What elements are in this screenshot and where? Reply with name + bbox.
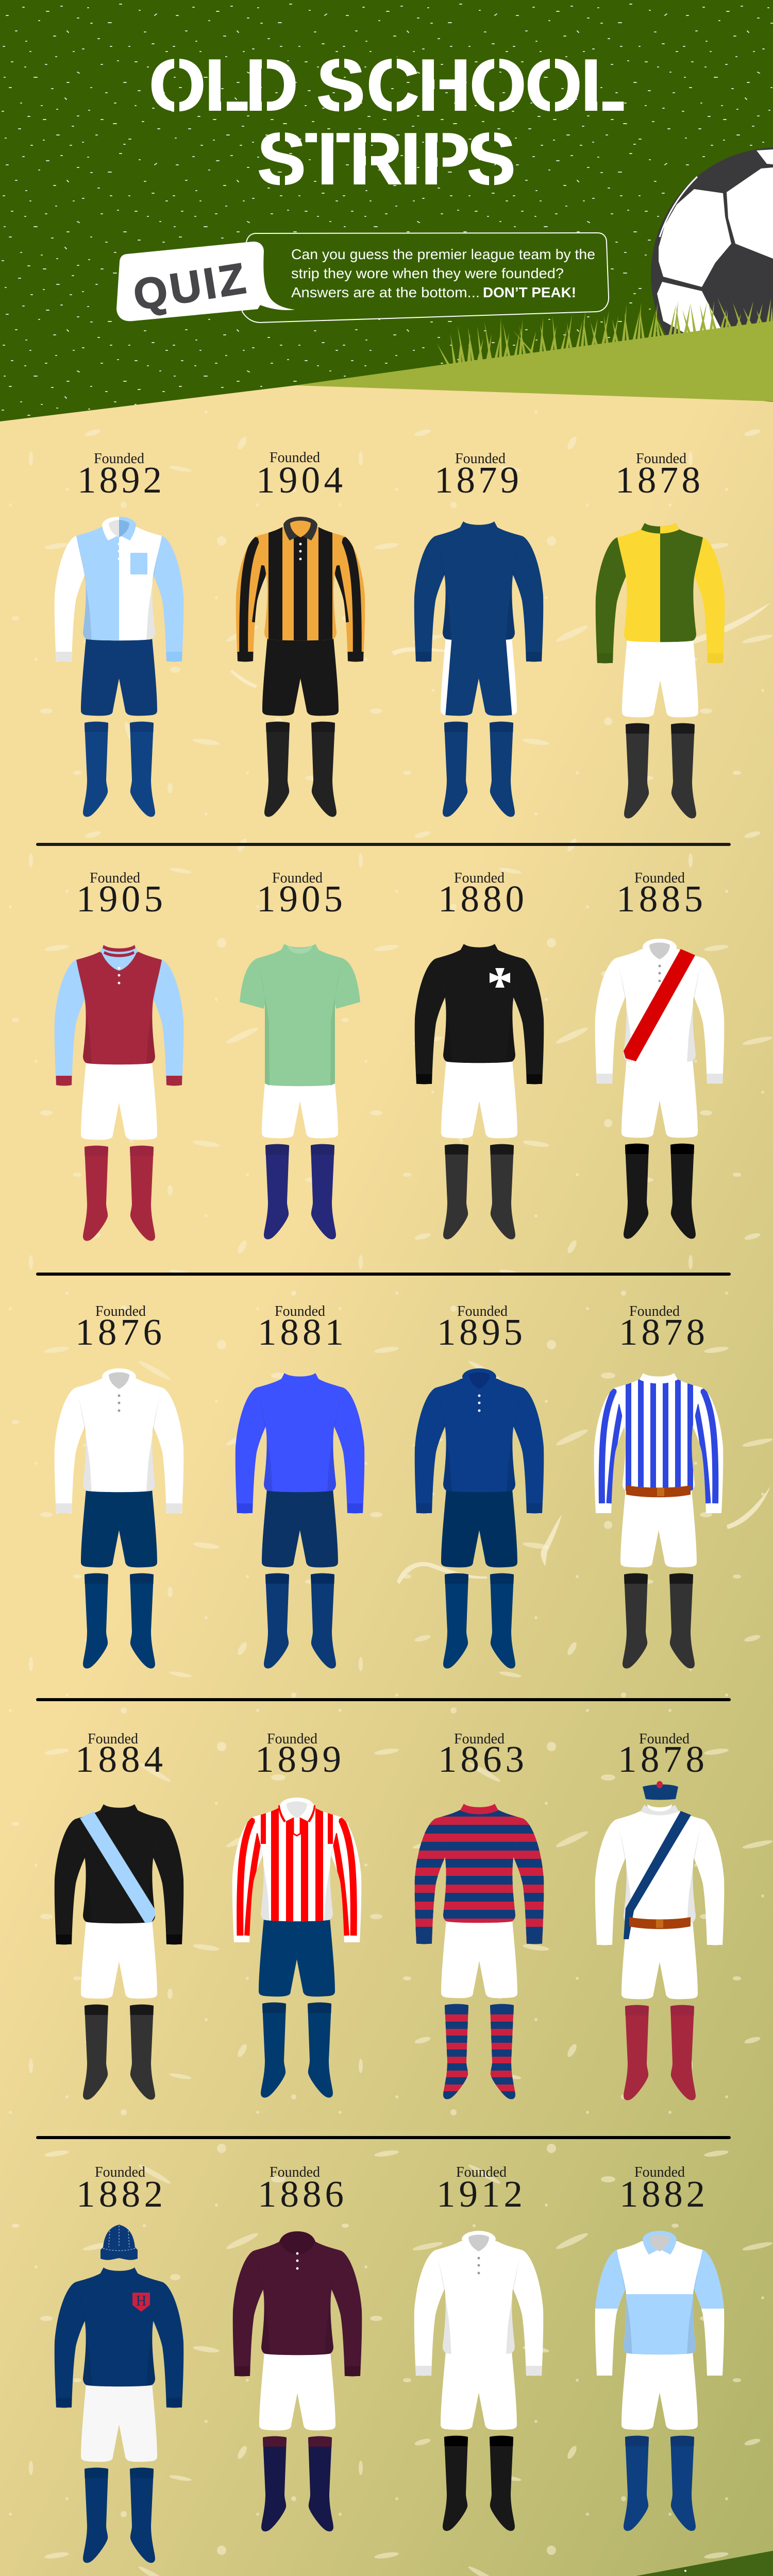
shirt bbox=[414, 2231, 543, 2376]
socks bbox=[443, 1144, 515, 1240]
divider line 2 bbox=[36, 1273, 731, 1276]
socks bbox=[624, 2436, 696, 2531]
heading: 1863: 1863 bbox=[438, 1738, 524, 1780]
quiz text box: strip they wore when they were founded? bbox=[291, 265, 564, 281]
socks bbox=[443, 722, 515, 817]
shorts bbox=[441, 635, 517, 718]
heading: 1905 second: Founded bbox=[272, 870, 323, 886]
row 5 headings bbox=[76, 2164, 705, 2215]
shirt bbox=[412, 1804, 546, 1944]
large sand paint splashes bbox=[230, 603, 770, 1584]
kit: 1884 bbox=[55, 1804, 183, 2100]
heading: 1884: Founded bbox=[88, 1731, 138, 1747]
heading: 1905: Founded bbox=[90, 870, 140, 886]
shorts bbox=[441, 2351, 517, 2430]
shorts bbox=[620, 1489, 697, 1567]
shirt bbox=[596, 518, 725, 664]
shorts bbox=[81, 1061, 157, 1140]
socks bbox=[264, 722, 337, 817]
kit: 1892 bbox=[55, 517, 183, 817]
heading: 1880: Founded bbox=[454, 870, 505, 886]
light grass strip bbox=[296, 321, 773, 401]
shorts bbox=[621, 2351, 698, 2430]
shirt bbox=[55, 1804, 183, 1944]
heading: 1892: Founded bbox=[94, 451, 144, 467]
kit: 1878 blue stripes bbox=[594, 1373, 723, 1669]
heading: 1878: Founded bbox=[639, 1731, 690, 1747]
shirt bbox=[415, 944, 544, 1084]
shorts bbox=[262, 1060, 338, 1138]
shirt bbox=[414, 521, 543, 662]
heading: 1885: Founded bbox=[634, 870, 685, 886]
shorts bbox=[259, 2352, 335, 2430]
heading: 1884: 1884 bbox=[75, 1738, 163, 1780]
kit: 1881 bbox=[236, 1373, 364, 1669]
kit: 1895 bbox=[415, 1368, 544, 1669]
icon: white cross badge bbox=[490, 968, 510, 988]
shirt bbox=[236, 1373, 364, 1514]
heading: 1879: 1879 bbox=[434, 459, 519, 501]
belt bbox=[629, 1917, 691, 1929]
icon: cap bbox=[100, 2225, 138, 2260]
quiz text box: DON’T PEAK! bbox=[483, 284, 576, 300]
row 4 headings bbox=[75, 1731, 704, 1780]
grass blades bbox=[437, 298, 773, 367]
icon: cap bbox=[643, 1781, 678, 1800]
heading: 1885: 1885 bbox=[616, 878, 703, 920]
shirt bbox=[55, 2267, 183, 2408]
title: OLD SCHOOL bbox=[149, 44, 626, 126]
socks bbox=[624, 1144, 696, 1239]
socks bbox=[83, 1146, 155, 1241]
football bbox=[651, 147, 773, 402]
kit: 1880 bbox=[415, 944, 544, 1240]
kit: 1878 yellow and green bbox=[596, 518, 725, 819]
shirt bbox=[55, 517, 183, 662]
kit: 1863 bbox=[412, 1804, 546, 2102]
heading: 1895: Founded bbox=[457, 1303, 508, 1319]
kit: 1882 sky blue bbox=[593, 2231, 727, 2531]
shorts bbox=[621, 1921, 698, 1999]
heading: 1863: Founded bbox=[454, 1731, 505, 1747]
shirt bbox=[595, 939, 724, 1084]
shorts bbox=[441, 1489, 517, 1567]
heading: 1912: 1912 bbox=[436, 2173, 523, 2215]
heading: 1905 second: 1905 bbox=[257, 878, 343, 920]
shorts bbox=[259, 1918, 335, 1996]
socks bbox=[83, 1573, 155, 1669]
shorts bbox=[621, 1059, 698, 1138]
shorts bbox=[81, 1920, 157, 1998]
socks bbox=[623, 1573, 695, 1669]
heading: 1878: Founded bbox=[629, 1303, 680, 1319]
divider line 4 bbox=[36, 2136, 731, 2139]
shirt bbox=[594, 1373, 723, 1513]
shorts bbox=[441, 1920, 517, 1998]
socks bbox=[83, 2468, 155, 2563]
heading: 1899: Founded bbox=[267, 1731, 317, 1747]
shirt bbox=[240, 944, 360, 1086]
heading: 1912: Founded bbox=[456, 2164, 507, 2180]
kit: 1904 bbox=[236, 517, 365, 817]
socks bbox=[624, 723, 696, 819]
shirt bbox=[236, 517, 365, 664]
socks bbox=[443, 2436, 515, 2531]
heading: 1876: 1876 bbox=[75, 1311, 162, 1353]
socks bbox=[264, 1573, 336, 1669]
icon: crest: H bbox=[136, 2293, 146, 2309]
socks bbox=[443, 1573, 515, 1669]
heading: 1881: Founded bbox=[275, 1303, 325, 1319]
socks bbox=[261, 2003, 333, 2098]
heading: 1882: Founded bbox=[95, 2164, 145, 2180]
shirt bbox=[55, 1368, 183, 1514]
heading: 1886: 1886 bbox=[258, 2173, 344, 2215]
shirt bbox=[595, 1804, 724, 1945]
icon: crest bbox=[132, 2293, 150, 2312]
shorts bbox=[81, 637, 157, 716]
heading: 1878: 1878 bbox=[615, 459, 700, 501]
heading: 1880: 1880 bbox=[438, 878, 524, 920]
heading: 1879: Founded bbox=[455, 451, 506, 467]
heading: 1878: 1878 bbox=[618, 1738, 704, 1780]
heading: 1886: Founded bbox=[270, 2164, 320, 2180]
heading: 1882 second: Founded bbox=[634, 2164, 685, 2180]
socks bbox=[83, 2005, 155, 2100]
shorts bbox=[262, 1489, 338, 1567]
shirt bbox=[232, 1798, 361, 1942]
heading: 1892: 1892 bbox=[77, 459, 162, 501]
row 1 headings bbox=[77, 450, 700, 501]
header pitch panel bbox=[0, 0, 773, 421]
quiz text box: Can you guess the premier league team by the bbox=[291, 246, 595, 262]
answers panel bbox=[0, 2551, 773, 2576]
socks bbox=[264, 1144, 336, 1240]
heading: 1878: 1878 bbox=[619, 1311, 705, 1353]
title: STRIPS bbox=[257, 118, 516, 200]
quiz text box bbox=[242, 233, 609, 323]
shirt bbox=[233, 2231, 362, 2376]
kit: 1886 bbox=[233, 2231, 362, 2532]
shirt bbox=[55, 945, 183, 1086]
socks bbox=[261, 2436, 333, 2532]
quiz text box: Answers are at the bottom... bbox=[291, 284, 480, 300]
row 3 headings bbox=[75, 1303, 705, 1353]
socks bbox=[83, 722, 155, 817]
heading: 1899: 1899 bbox=[255, 1738, 341, 1780]
kit: 1882 navy with cap bbox=[55, 2225, 183, 2563]
kit: 1879 bbox=[414, 521, 543, 817]
divider line 3 bbox=[36, 1698, 731, 1701]
heading: 1881: 1881 bbox=[258, 1311, 344, 1353]
kit: 1878 sash and cap bbox=[595, 1781, 724, 2100]
shorts bbox=[81, 1489, 157, 1567]
divider line 1 bbox=[36, 843, 731, 846]
kit: 1905 green bbox=[240, 944, 360, 1240]
heading: 1904: Founded bbox=[270, 450, 320, 466]
shirt bbox=[415, 1368, 544, 1514]
kit: 1885 bbox=[595, 939, 724, 1239]
shorts bbox=[441, 1060, 517, 1138]
heading: 1905: 1905 bbox=[76, 878, 163, 920]
belt bbox=[626, 1485, 691, 1497]
quiz speech bubble bbox=[116, 242, 295, 321]
row 2 headings bbox=[76, 870, 703, 920]
shorts bbox=[622, 639, 698, 717]
title bbox=[149, 44, 626, 200]
shorts bbox=[81, 2383, 157, 2462]
heading: 1895: 1895 bbox=[437, 1311, 523, 1353]
heading: 1878: Founded bbox=[636, 451, 686, 467]
kit: 1905 claret bbox=[55, 945, 183, 1241]
kit: 1912 bbox=[414, 2231, 543, 2531]
kit: 1876 bbox=[55, 1368, 183, 1669]
heading: 1904: 1904 bbox=[256, 459, 343, 501]
heading: 1882 second: 1882 bbox=[619, 2173, 705, 2215]
socks bbox=[624, 2005, 696, 2100]
heading: 1876: Founded bbox=[95, 1303, 146, 1319]
kit: 1899 bbox=[232, 1798, 361, 2098]
socks bbox=[438, 2004, 520, 2102]
shorts bbox=[262, 637, 339, 716]
shirt bbox=[593, 2231, 727, 2376]
quiz speech bubble: QUIZ bbox=[130, 254, 248, 319]
heading: 1882: 1882 bbox=[76, 2173, 163, 2215]
